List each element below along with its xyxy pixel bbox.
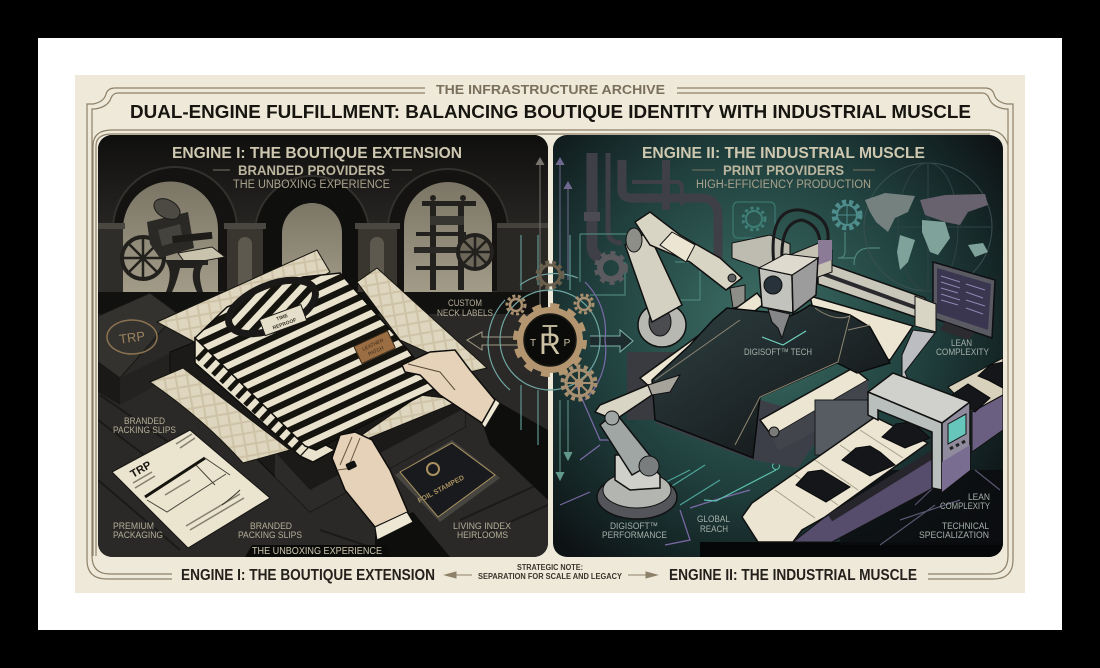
right panel labels bbox=[602, 145, 991, 541]
left panel labels: NECK LABELS bbox=[437, 308, 493, 319]
tissue paper wrap bbox=[150, 250, 487, 463]
packing slip bbox=[112, 430, 270, 548]
right panel labels: GLOBAL bbox=[697, 514, 730, 525]
left panel labels: LIVING INDEX bbox=[453, 521, 512, 532]
right panel labels: LEAN bbox=[951, 338, 972, 349]
strategic note: SEPARATION FOR SCALE AND LEGACY bbox=[478, 572, 623, 581]
right panel labels: HIGH-EFFICIENCY PRODUCTION bbox=[696, 179, 871, 191]
icon: TRP gift box: TRP bbox=[118, 328, 146, 347]
icon: grey gear bbox=[596, 253, 626, 283]
medallion: TRP gear logo bbox=[516, 306, 584, 374]
strategic note: STRATEGIC NOTE: bbox=[517, 563, 583, 572]
right panel labels: REACH bbox=[700, 524, 728, 535]
arrow: footer left bbox=[445, 572, 472, 578]
circuit arcs around medallion bbox=[488, 235, 606, 445]
right panel labels: TECHNICAL bbox=[942, 521, 989, 532]
left panel labels: PACKING SLIPS bbox=[113, 425, 176, 436]
shirts on conveyor bbox=[796, 362, 1003, 502]
left panel labels: ENGINE I: THE BOUTIQUE EXTENSION bbox=[172, 145, 462, 162]
robot arm: small bbox=[595, 375, 680, 519]
circuit traces bbox=[560, 232, 1000, 545]
medallion: TRP gear logo: R bbox=[539, 328, 561, 361]
globe and world map bbox=[864, 163, 992, 291]
leather patch bbox=[354, 331, 395, 364]
cream poster background bbox=[75, 75, 1025, 593]
right panel labels: ENGINE II: THE INDUSTRIAL MUSCLE bbox=[642, 145, 925, 162]
monitor bbox=[933, 262, 995, 340]
foil stamped card bbox=[395, 440, 500, 522]
hand lifting shirt bbox=[402, 350, 548, 500]
panel: engine I boutique extension bbox=[98, 135, 548, 557]
robot arm: large bbox=[625, 212, 745, 420]
left panel labels: CUSTOM bbox=[448, 298, 482, 309]
icon: small gears bbox=[507, 262, 596, 400]
decorative frame bbox=[87, 88, 1013, 579]
right panel labels: DIGISOFT™ bbox=[610, 521, 658, 532]
foil stamped card: FOIL STAMPED bbox=[417, 475, 466, 505]
left panel labels: BRANDED bbox=[250, 521, 292, 532]
packing slip: TRP bbox=[128, 459, 154, 481]
right panel labels: COMPLEXITY bbox=[936, 347, 990, 358]
black t-shirt on platen bbox=[652, 305, 890, 458]
icon: cylinder printing press bbox=[122, 194, 225, 292]
arrow: right of medallion bbox=[590, 330, 633, 352]
table surface bbox=[98, 292, 548, 557]
leather patch: PATCH bbox=[367, 345, 385, 358]
left panel labels: PACKAGING bbox=[113, 530, 163, 541]
main title: DUAL-ENGINE FULFILLMENT: BALANCING BOUTIQUE IDENTITY WITH INDUSTRIAL MUSCLE bbox=[130, 101, 971, 122]
hand on box with ring bbox=[332, 432, 450, 557]
conveyor belt bbox=[742, 358, 1003, 542]
print head gantry bbox=[732, 210, 936, 385]
leather patch: LEATHER bbox=[362, 338, 385, 353]
scanner machine bbox=[868, 373, 970, 492]
strategic note bbox=[478, 563, 623, 581]
right panel labels: DIGISOFT™ TECH bbox=[744, 347, 812, 358]
left panel labels bbox=[113, 145, 512, 541]
right panel labels: PRINT PROVIDERS bbox=[723, 162, 844, 178]
footer: engine II: ENGINE II: THE INDUSTRIAL MUSCLE bbox=[669, 567, 917, 584]
panel: engine II industrial muscle bbox=[553, 135, 1003, 557]
architecture wall and arches bbox=[98, 135, 548, 292]
icon: iron hand press bbox=[414, 195, 492, 290]
icon: TRP gift box bbox=[98, 293, 177, 405]
print bed bbox=[640, 293, 913, 468]
left panel labels: THE UNBOXING EXPERIENCE bbox=[233, 179, 390, 191]
right panel labels: COMPLEXITY bbox=[940, 501, 991, 512]
left panel labels: PREMIUM bbox=[113, 521, 154, 532]
arrow: left of medallion bbox=[466, 331, 518, 351]
footer: engine I: ENGINE I: THE BOUTIQUE EXTENSION bbox=[181, 567, 435, 584]
striped shirt bbox=[195, 269, 436, 462]
left panel labels: BRANDED bbox=[124, 416, 165, 427]
left panel labels: HEIRLOOMS bbox=[457, 530, 508, 541]
pipework bbox=[584, 153, 718, 262]
right panel labels: LEAN bbox=[968, 492, 990, 503]
center divider bbox=[548, 135, 553, 557]
medallion: TRP gear logo: P bbox=[564, 338, 571, 349]
neck label bbox=[260, 305, 307, 336]
arrow: footer right bbox=[628, 572, 657, 578]
icon: teal globe gear bbox=[834, 202, 860, 228]
right panel labels: SPECIALIZATION bbox=[919, 530, 989, 541]
right panel labels: PERFORMANCE bbox=[602, 530, 667, 541]
tab: the unboxing experience: THE UNBOXING EXPERIENCE bbox=[252, 546, 382, 557]
medallion: TRP gear logo: T bbox=[530, 338, 536, 349]
medallion: TRP gear logo: T bbox=[542, 319, 558, 349]
left panel labels: PACKING SLIPS bbox=[238, 530, 302, 541]
icon: gear in rounded box bbox=[733, 202, 775, 238]
packaging box bbox=[170, 342, 466, 512]
arrows: vertical flow bbox=[556, 158, 572, 480]
left panel labels: BRANDED PROVIDERS bbox=[238, 162, 385, 178]
arrow: vertical on left panel bbox=[536, 158, 544, 310]
neck label: TIME bbox=[276, 313, 290, 323]
kicker: the infrastructure archive: THE INFRASTRUCTURE ARCHIVE bbox=[436, 82, 665, 97]
neck label: REPROOF bbox=[272, 317, 297, 331]
